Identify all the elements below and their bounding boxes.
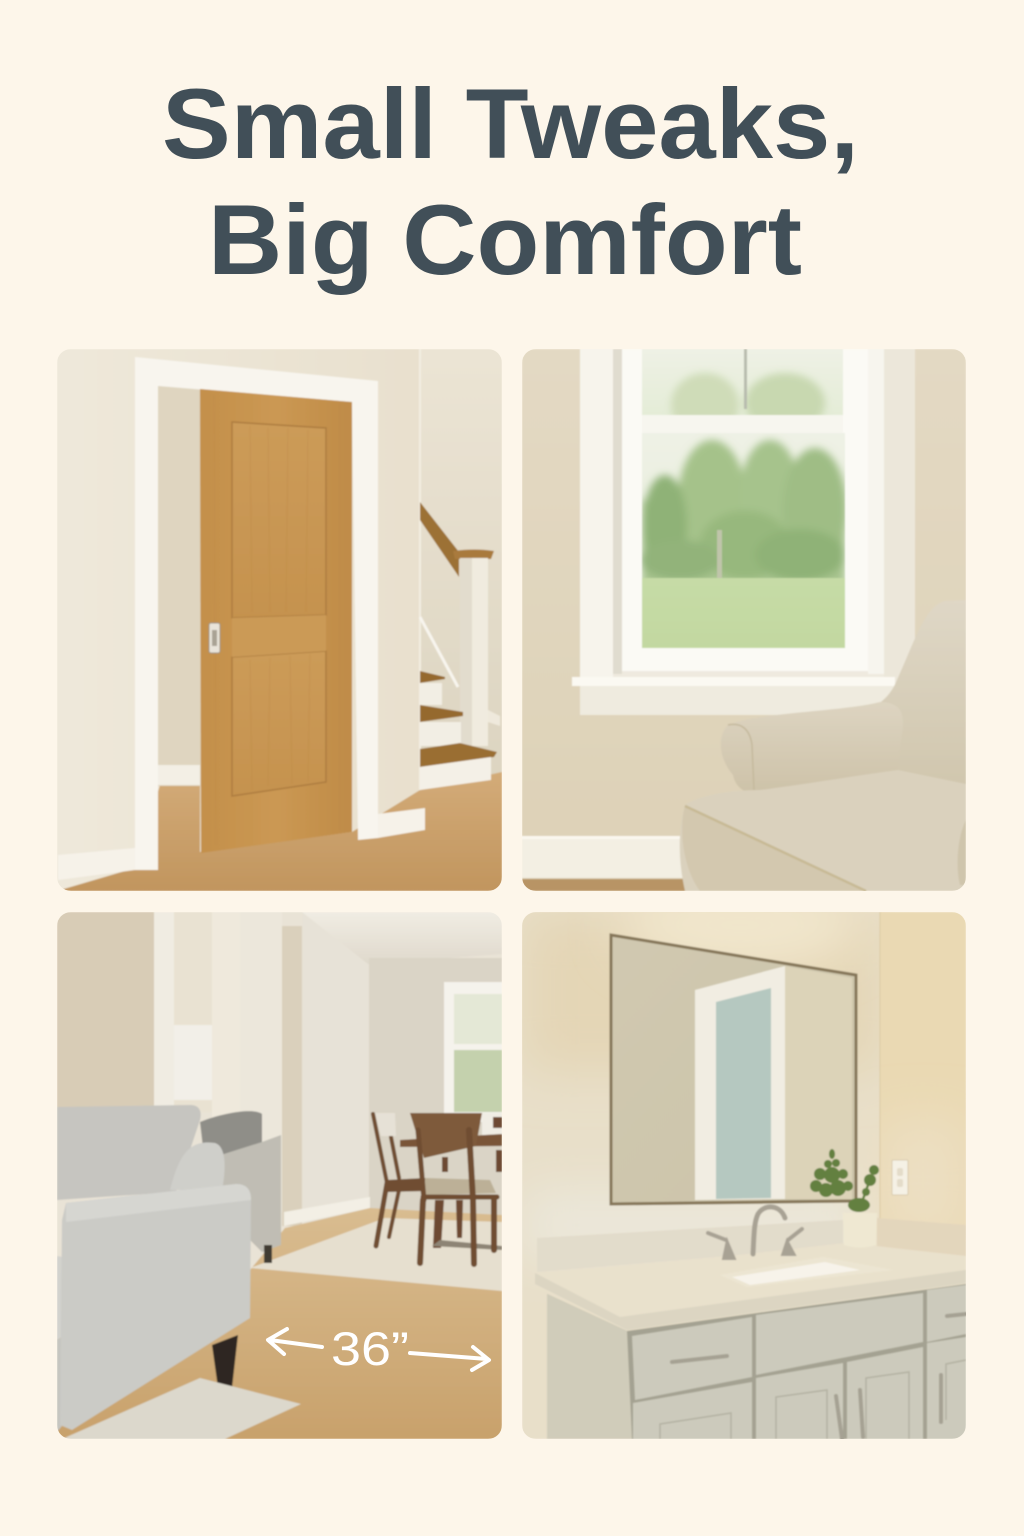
back chair — [373, 1114, 399, 1246]
outlet — [892, 1160, 908, 1195]
oak door — [200, 389, 352, 853]
armchair — [680, 600, 966, 891]
upper glass — [642, 349, 843, 415]
title: Big Comfort — [208, 184, 802, 295]
sill — [572, 677, 895, 686]
mirror — [611, 935, 856, 1204]
title — [162, 68, 859, 295]
staircase — [420, 502, 500, 790]
backsplash — [538, 1221, 842, 1255]
door trim — [135, 357, 378, 870]
faucet — [708, 1207, 802, 1259]
rug front — [62, 1378, 301, 1439]
baseboard — [284, 1197, 370, 1226]
measure arrows and label — [266, 1326, 492, 1372]
window casing — [612, 670, 884, 678]
panel: pocket door — [57, 349, 502, 891]
measure arrows and label: 36” — [331, 1322, 409, 1375]
counter — [796, 1248, 822, 1252]
window — [444, 982, 502, 1122]
cabinet — [547, 1284, 966, 1439]
sink — [720, 1257, 893, 1287]
title: Small Tweaks, — [162, 68, 859, 179]
dining set — [373, 1113, 502, 1264]
panel: window and armchair — [522, 349, 966, 891]
rug — [250, 1218, 502, 1291]
panel: bathroom vanity — [522, 880, 966, 1439]
lower glass — [642, 433, 845, 578]
front armchair — [57, 1105, 251, 1432]
pot and plant — [847, 1164, 880, 1216]
panel: wide clearance living room — [57, 912, 502, 1439]
back sofa — [199, 1110, 263, 1155]
front chair — [410, 1113, 482, 1158]
floor — [57, 1208, 502, 1439]
plant in mirror — [810, 1149, 853, 1197]
